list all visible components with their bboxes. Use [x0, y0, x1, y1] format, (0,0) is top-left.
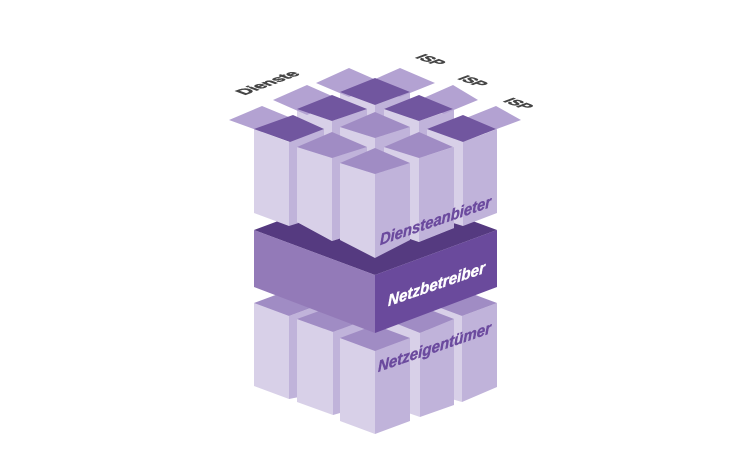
label: Netzbetreiber: Netzbetreiber — [388, 259, 486, 310]
column: Dienste corner — [229, 106, 324, 226]
label: ISP 3: ISP — [499, 97, 537, 111]
label: ISP 1: ISP — [411, 53, 449, 67]
column: second row right — [384, 85, 478, 242]
middle layer: network operator slab — [254, 185, 497, 333]
column: second row left — [273, 85, 367, 241]
column: center — [340, 112, 410, 230]
column: front — [340, 148, 410, 258]
lower layer: network owner columns — [254, 277, 497, 434]
column: ISP corner — [427, 106, 521, 226]
heading: Dienste: Dienste — [231, 69, 305, 97]
column: back — [316, 68, 435, 200]
upper layer: service provider columns — [229, 68, 521, 258]
label: Netzeigentümer: Netzeigentümer — [378, 319, 492, 376]
label: ISP 2: ISP — [453, 74, 492, 89]
column: third row right — [384, 132, 454, 242]
label: Diensteanbieter: Diensteanbieter — [380, 193, 492, 249]
column: third row left — [297, 132, 367, 241]
